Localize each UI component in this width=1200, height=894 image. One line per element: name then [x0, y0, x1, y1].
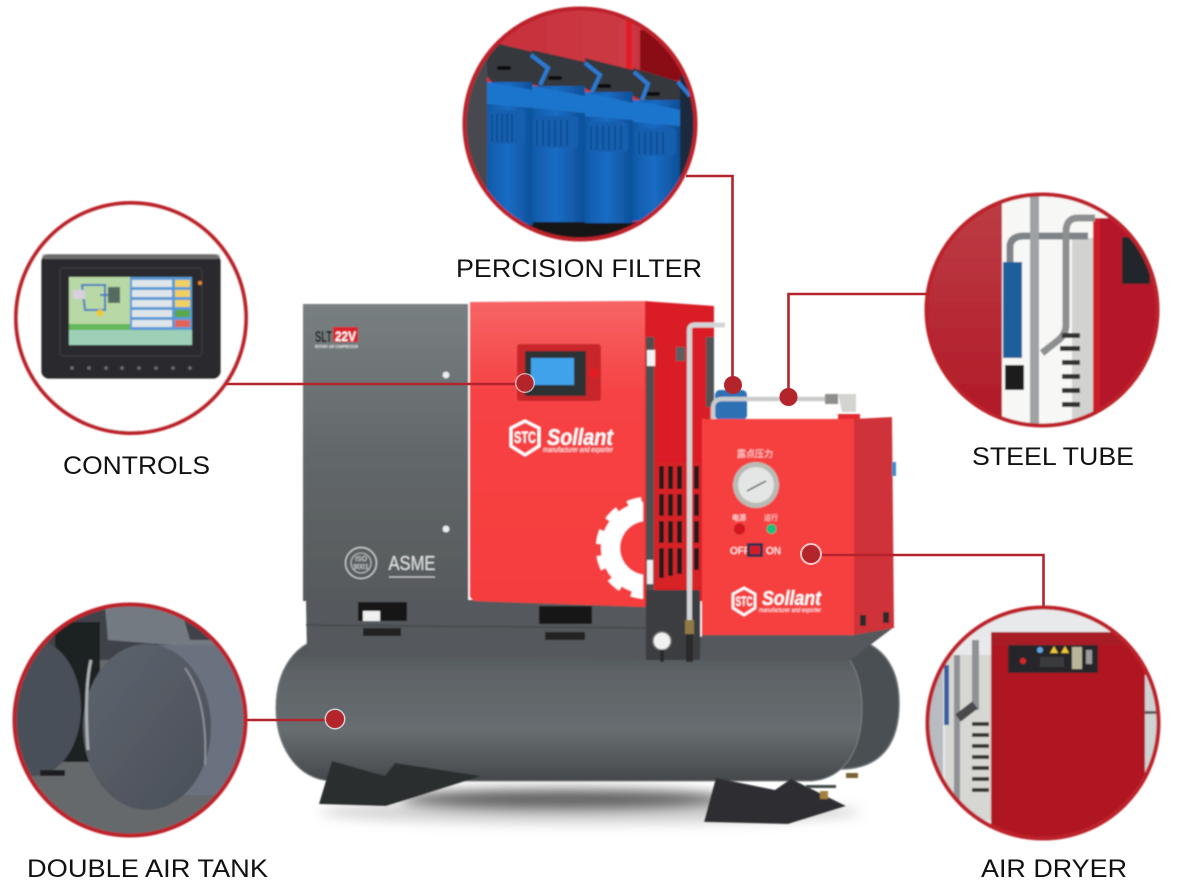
Sollant logo door: Sollant [547, 424, 614, 450]
Sollant logo dryer [733, 588, 822, 615]
gear emblem [595, 496, 644, 600]
certification marks: ASME [388, 553, 436, 575]
tank foot left [319, 761, 481, 806]
dryer indicators and switch: ON [766, 546, 781, 557]
compressor base [306, 600, 646, 659]
dryer indicators and switch [730, 513, 781, 557]
dryer indicators and switch: 电源 [732, 513, 746, 522]
connector: steel tube [780, 294, 928, 406]
detail circle: double air tank [0, 600, 250, 840]
side housing [644, 301, 714, 660]
base vents [358, 602, 592, 640]
ground shadow [320, 789, 860, 824]
tank drain fittings [806, 773, 858, 799]
detail circle: controls [16, 203, 246, 433]
dryer front [702, 419, 854, 635]
dryer indicators and switch: OFF [730, 546, 750, 557]
dryer control strip [1008, 645, 1098, 673]
detail circle: air dryer [925, 605, 1162, 847]
compressor machine [276, 301, 899, 824]
connector: air dryer [800, 543, 1044, 609]
certification marks: 9001 [353, 564, 369, 571]
connector: controls [226, 373, 535, 393]
dryer gauge: 露点压力 [737, 448, 773, 459]
certification marks [346, 548, 436, 578]
model badge: 22V [335, 328, 357, 344]
Sollant logo door: STC [514, 428, 536, 447]
dryer base [702, 627, 894, 661]
label: air dryer: AIR DRYER [981, 855, 1127, 883]
dryer gauge [733, 448, 779, 508]
steel tube on dryer [713, 394, 860, 420]
model badge [315, 327, 359, 349]
main air tank [276, 637, 862, 781]
pipe fitting and gauge [653, 620, 694, 662]
panel screws [443, 372, 497, 533]
grey panel [303, 304, 468, 601]
detail circle: percision filter [460, 5, 700, 247]
filter 1 [487, 43, 533, 225]
blue filter behind dryer [715, 390, 747, 420]
detail circle: steel tube [925, 190, 1160, 430]
rear air tank [836, 637, 899, 769]
filter 3 [585, 58, 633, 223]
Sollant logo dryer: Sollant [762, 588, 822, 610]
connector: double air tank [245, 708, 346, 730]
blue clips [531, 55, 690, 100]
Sollant logo dryer: manufacturer and exporter [759, 608, 822, 614]
vertical pipe [690, 325, 725, 622]
filter 4 [633, 68, 680, 221]
controller device [41, 254, 221, 379]
Sollant logo door [511, 421, 614, 455]
Sollant logo door: manufacturer and exporter [543, 447, 614, 454]
label: controls: CONTROLS [63, 452, 210, 480]
model badge: SLT [315, 329, 332, 346]
label: steel tube: STEEL TUBE [972, 443, 1134, 471]
filter 2 [532, 50, 585, 222]
dryer side [853, 417, 894, 635]
label: percision filter: PERCISION FILTER [456, 255, 702, 283]
control window [517, 344, 601, 401]
Sollant logo dryer: STC [736, 593, 752, 609]
model badge: ROTARY AIR COMPRESSOR [315, 344, 359, 349]
red door panel [470, 301, 645, 607]
connector: percision filter [686, 176, 742, 394]
tank foot right [704, 778, 846, 824]
label: double air tank: DOUBLE AIR TANK [27, 855, 268, 883]
certification marks: ISO [355, 556, 368, 563]
dryer indicators and switch: 运行 [764, 513, 778, 522]
